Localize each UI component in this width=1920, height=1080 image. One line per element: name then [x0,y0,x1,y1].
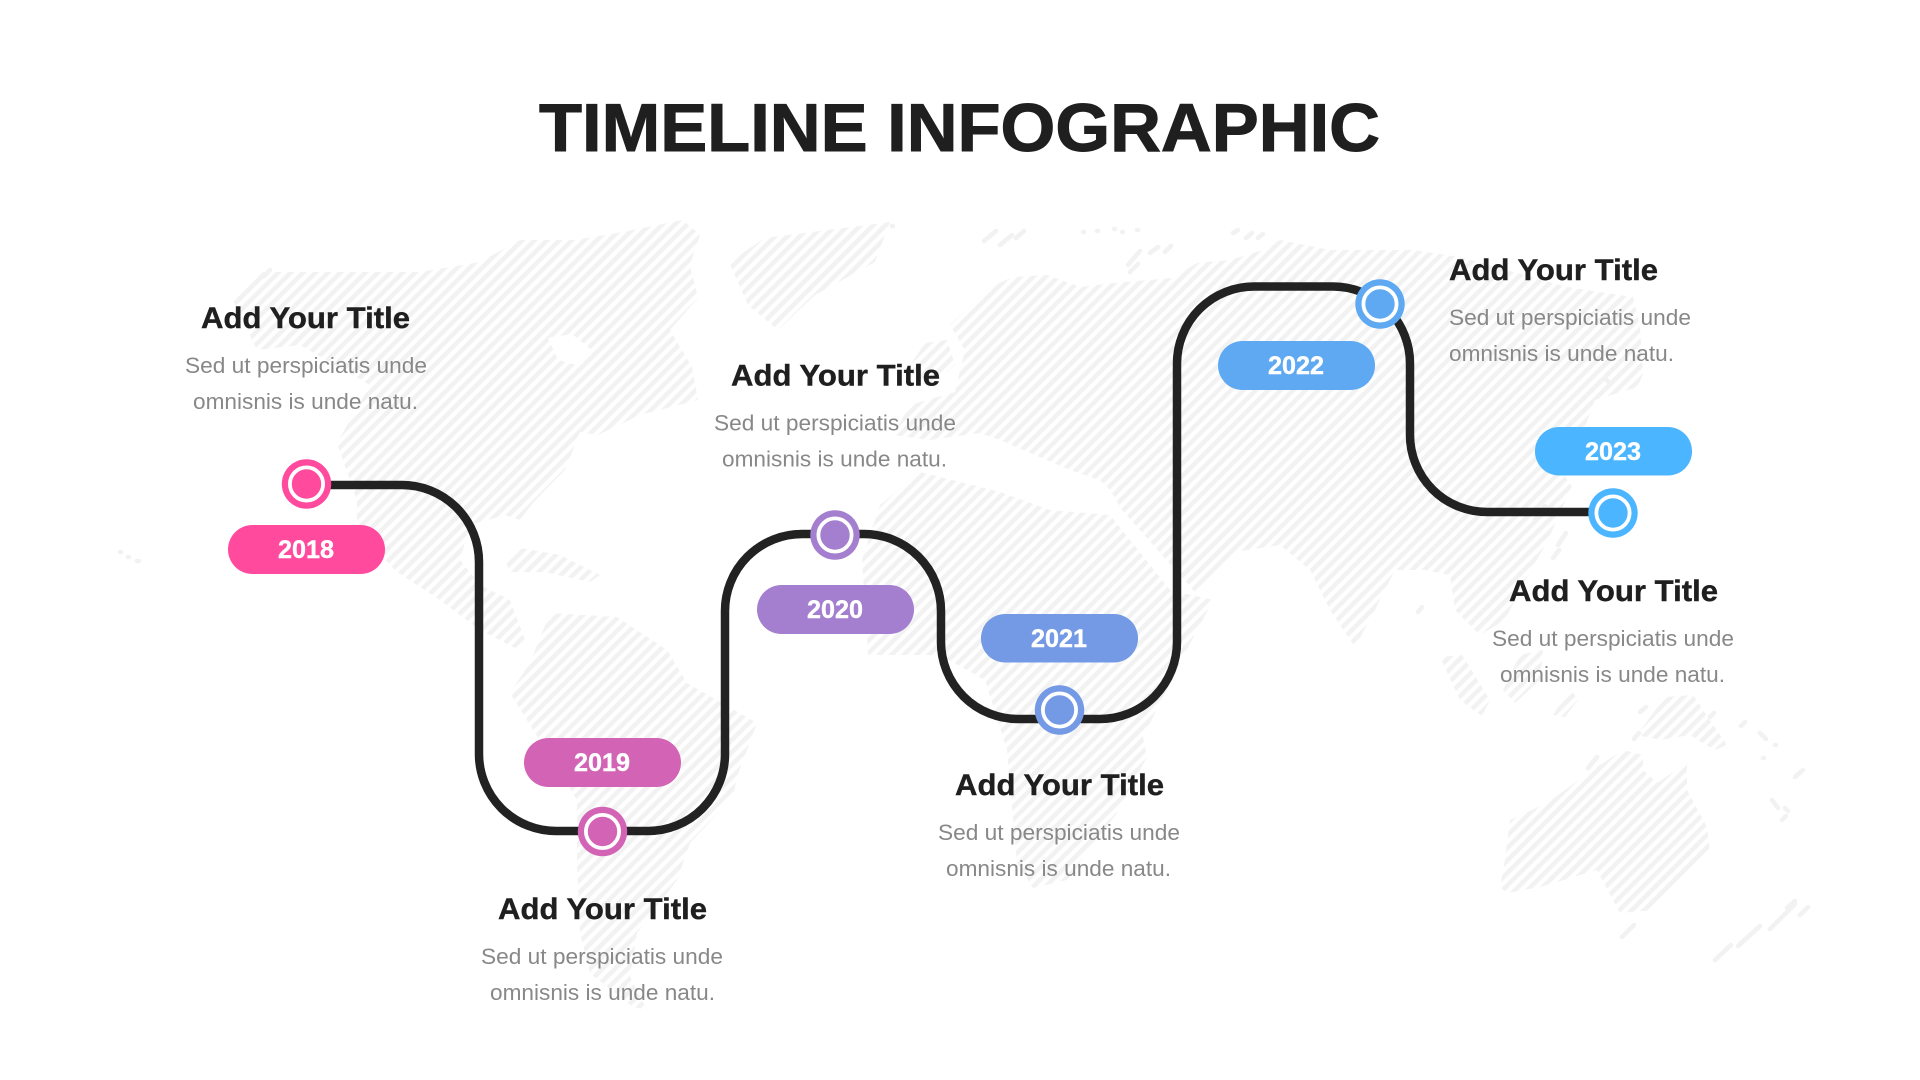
text 2019 [481,893,723,1005]
node 2019 [578,807,627,856]
timeline path [306,286,1613,831]
text 2021 [938,769,1180,881]
pill 2023 [1535,427,1692,476]
text 2023 [1492,575,1734,687]
pill 2023: 2023 [1585,438,1641,466]
text 2020 [714,360,956,472]
pill 2020: 2020 [807,596,863,624]
node 2018 [282,459,331,509]
pill 2021: 2021 [1031,625,1087,653]
text 2022: Add Your Title [1449,254,1658,287]
pill 2020 [757,585,914,634]
pill 2019 [524,738,681,787]
pill 2021 [981,614,1138,662]
milestone 2022 [1218,254,1691,390]
text 2019: Add Your Title [498,893,707,926]
text 2019: Sed ut perspiciatis unde [481,944,723,969]
pill 2022: 2022 [1268,352,1324,380]
text 2021: omnisnis is unde natu. [946,856,1171,881]
text 2022 [1449,254,1691,366]
text 2021: Sed ut perspiciatis unde [938,820,1180,845]
text 2021: Add Your Title [955,769,1164,802]
text 2022: omnisnis is unde natu. [1449,341,1674,366]
milestone 2021 [938,614,1180,881]
text 2019: omnisnis is unde natu. [490,980,715,1005]
text 2023: Sed ut perspiciatis unde [1492,626,1734,651]
text 2020: Add Your Title [731,360,940,392]
milestone 2023 [1492,427,1734,687]
text 2018: Sed ut perspiciatis unde [185,353,427,378]
pill 2018: 2018 [278,536,334,564]
text 2023: omnisnis is unde natu. [1500,662,1725,687]
pill 2022 [1218,341,1375,390]
node 2020 [810,510,860,560]
text 2018: omnisnis is unde natu. [193,389,418,414]
node 2023 [1588,488,1638,538]
node 2022 [1355,279,1405,329]
text 2023: Add Your Title [1509,575,1718,608]
text 2018 [185,302,427,414]
text 2018: Add Your Title [201,302,410,335]
pill 2019: 2019 [574,749,630,777]
milestone 2019 [481,738,723,1005]
background world map [120,220,1808,1010]
title: TIMELINE INFOGRAPHIC [539,90,1380,166]
text 2020: Sed ut perspiciatis unde [714,410,956,436]
milestone 2020 [714,360,956,634]
node 2021 [1035,685,1084,735]
milestone 2018 [185,302,427,574]
pill 2018 [228,525,385,574]
text 2020: omnisnis is unde natu. [722,446,947,472]
text 2022: Sed ut perspiciatis unde [1449,305,1691,330]
